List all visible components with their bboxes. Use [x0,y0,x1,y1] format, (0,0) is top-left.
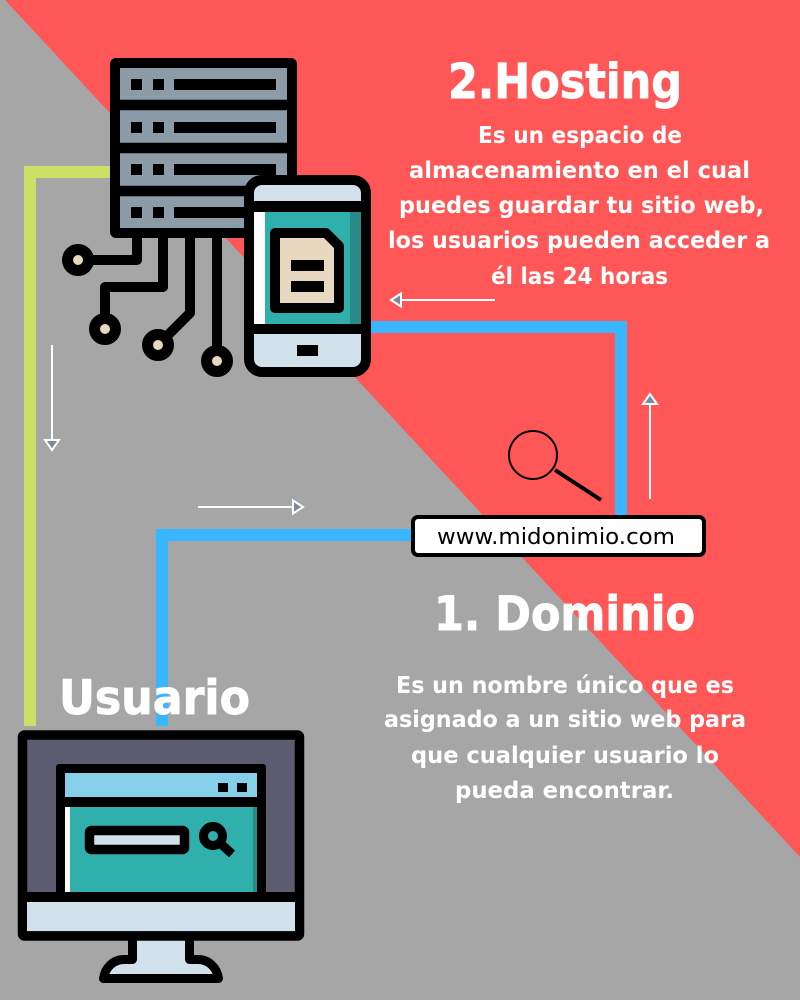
icon: magnifying glass [509,431,601,500]
icon: desktop monitor with browser [22,735,300,978]
server cabinet [115,63,292,233]
text block: domain description [384,671,746,804]
monitor stand [104,936,218,978]
text block: hosting description: Es un espacio de [478,121,682,149]
circuit traces [90,236,217,350]
monitor chin [27,892,295,931]
text block: hosting description: almacenamiento en el cual [409,156,750,184]
heading: user: Usuario [59,671,250,726]
domain address box [413,517,704,555]
SIM card [275,233,339,308]
arrow: down toward user [45,345,59,450]
text block: hosting description: puedes guardar tu sitio web, [399,191,764,219]
phone home button [297,345,318,356]
text block: domain description: que cualquier usuario lo [411,741,719,769]
text block: domain description: asignado a un sitio web para [384,705,746,733]
text block: hosting description: los usuarios pueden acceder a [388,226,770,254]
icon: smartphone with SIM card [249,180,366,372]
arrow: left toward hosting [391,294,495,306]
connector: blue line from domain to hosting [370,327,621,518]
phone screen [254,201,361,334]
arrow: right toward domain [198,500,303,514]
domain address box: www.midonimio.com [437,525,675,550]
arrow: up toward hosting [643,394,657,499]
text block: domain description: Es un nombre único que es [396,671,734,699]
text block: domain description: pueda encontrar. [455,776,674,804]
phone body [249,180,366,372]
monitor screen frame [22,735,300,936]
domain text panel [384,587,746,804]
hosting text panel [388,54,770,290]
text block: hosting description: él las 24 horas [491,262,668,290]
connector: green line from user to server [30,172,112,726]
circuit nodes [68,250,228,372]
search field [90,830,184,850]
connector: blue line from user to domain [162,535,414,726]
heading: domain: 1. Dominio [434,587,695,642]
browser window [56,764,266,894]
window buttons [218,783,247,792]
text block: hosting description [388,121,770,290]
icon: server with circuit lines [68,63,292,372]
heading: hosting: 2.Hosting [448,54,682,110]
search icon [204,826,222,846]
